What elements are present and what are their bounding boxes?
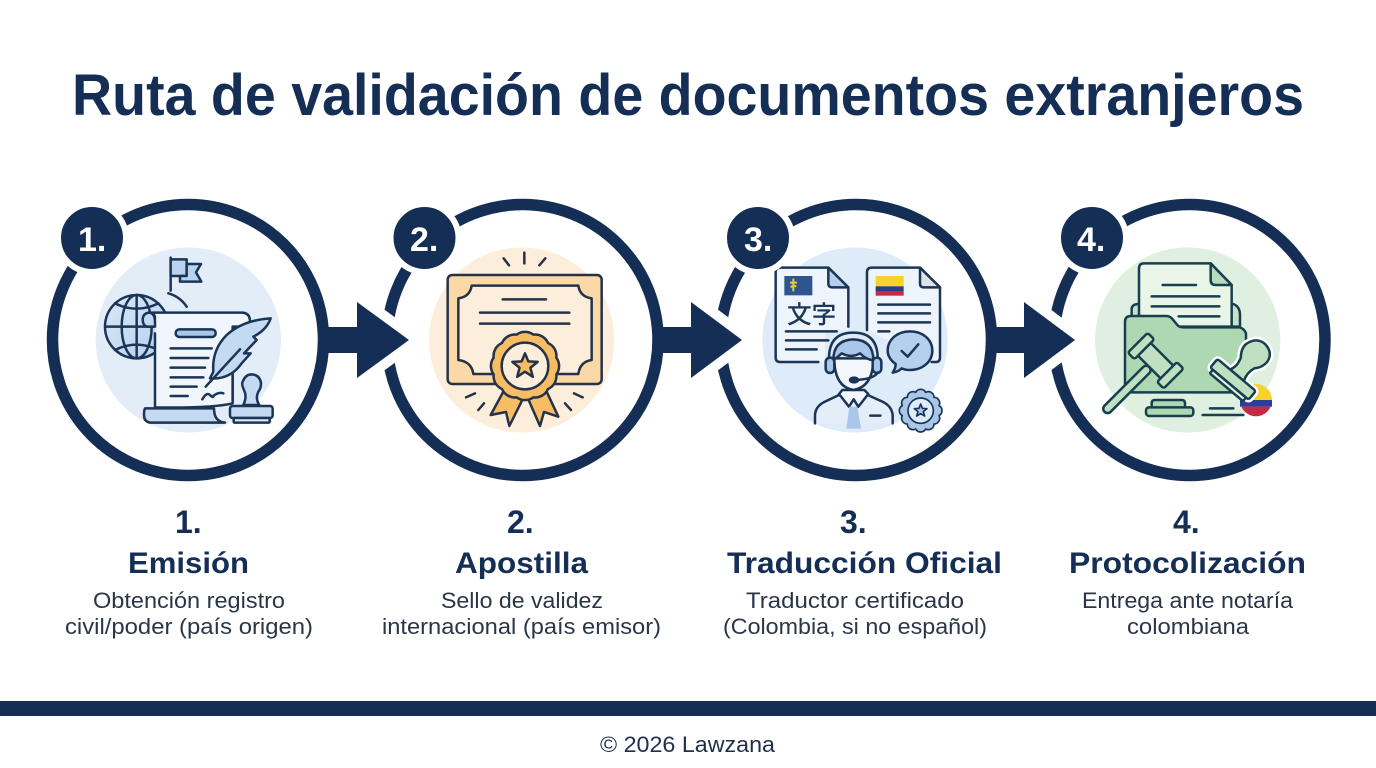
arrow 2 to 3 xyxy=(660,302,742,378)
rays xyxy=(466,253,583,410)
number badge 1 xyxy=(58,204,126,272)
document xyxy=(1139,263,1232,327)
colombian flag xyxy=(876,276,904,296)
number badge 3 xyxy=(724,204,792,272)
step text 3: 3. xyxy=(840,504,867,540)
footer copyright: © 2026 Lawzana xyxy=(600,732,776,757)
step text 4: Entrega ante notaría xyxy=(1082,588,1294,613)
number badge 4: 4. xyxy=(1077,221,1105,259)
foreign characters: 文字 xyxy=(787,295,836,331)
step ring 2 xyxy=(387,204,658,476)
step text 2 xyxy=(382,504,661,639)
step text 3 xyxy=(723,504,1002,639)
foreign flag xyxy=(784,276,812,295)
icon 3: translator with documents xyxy=(762,247,948,433)
globe xyxy=(105,293,187,358)
gavel xyxy=(1087,333,1183,430)
folder back xyxy=(1132,304,1240,327)
title: Ruta de validación de documentos extranjeros xyxy=(72,63,1304,128)
step text 1: Obtención registro xyxy=(93,588,285,613)
number badge 2 xyxy=(390,204,458,272)
step ring 3 xyxy=(720,204,992,476)
number badge 1: 1. xyxy=(78,221,106,259)
step text 2: Apostilla xyxy=(455,547,588,580)
step text 3: Traducción Oficial xyxy=(727,547,1002,580)
step text 2: internacional (país emisor) xyxy=(382,614,661,639)
step text 4 xyxy=(1069,504,1306,639)
target document xyxy=(867,268,940,362)
arrow 3 to 4 xyxy=(994,302,1075,378)
number badge 3: 3. xyxy=(744,221,772,259)
translator xyxy=(815,333,893,429)
step text 1 xyxy=(65,504,313,639)
rubber stamp xyxy=(1207,327,1283,403)
icon 4: folder, gavel and stamp xyxy=(1087,247,1283,433)
step text 4: 4. xyxy=(1173,504,1200,540)
rosette xyxy=(491,332,559,400)
number badge 2: 2. xyxy=(410,221,438,259)
speech bubble xyxy=(888,331,932,373)
certification badge xyxy=(899,389,942,432)
quill xyxy=(206,318,271,387)
icon 1: globe, scroll, quill and stamp xyxy=(96,247,281,433)
step text 3: (Colombia, si no español) xyxy=(723,614,987,639)
stamp xyxy=(230,374,273,423)
colombian flag circle xyxy=(1240,384,1272,416)
number badge 4 xyxy=(1058,204,1126,272)
step text 4: colombiana xyxy=(1127,614,1250,639)
icon 2: certificate with rosette xyxy=(429,247,614,433)
desk stamp base xyxy=(1146,400,1243,416)
folder front xyxy=(1125,316,1246,392)
ribbons xyxy=(491,392,558,426)
source document xyxy=(776,268,848,362)
arrow 1 to 2 xyxy=(327,302,409,378)
step text 1: Emisión xyxy=(128,547,249,580)
flag xyxy=(171,258,201,291)
step text 2: Sello de validez xyxy=(441,588,603,613)
step text 1: civil/poder (país origen) xyxy=(65,614,313,639)
footer bar xyxy=(0,701,1376,716)
step text 1: 1. xyxy=(175,504,202,540)
step text 4: Protocolización xyxy=(1069,547,1306,580)
step text 3: Traductor certificado xyxy=(746,588,964,613)
step ring 4 xyxy=(1054,204,1325,476)
scroll xyxy=(143,313,250,423)
certificate xyxy=(448,275,602,384)
step ring 1 xyxy=(52,204,324,476)
step text 2: 2. xyxy=(507,504,534,540)
